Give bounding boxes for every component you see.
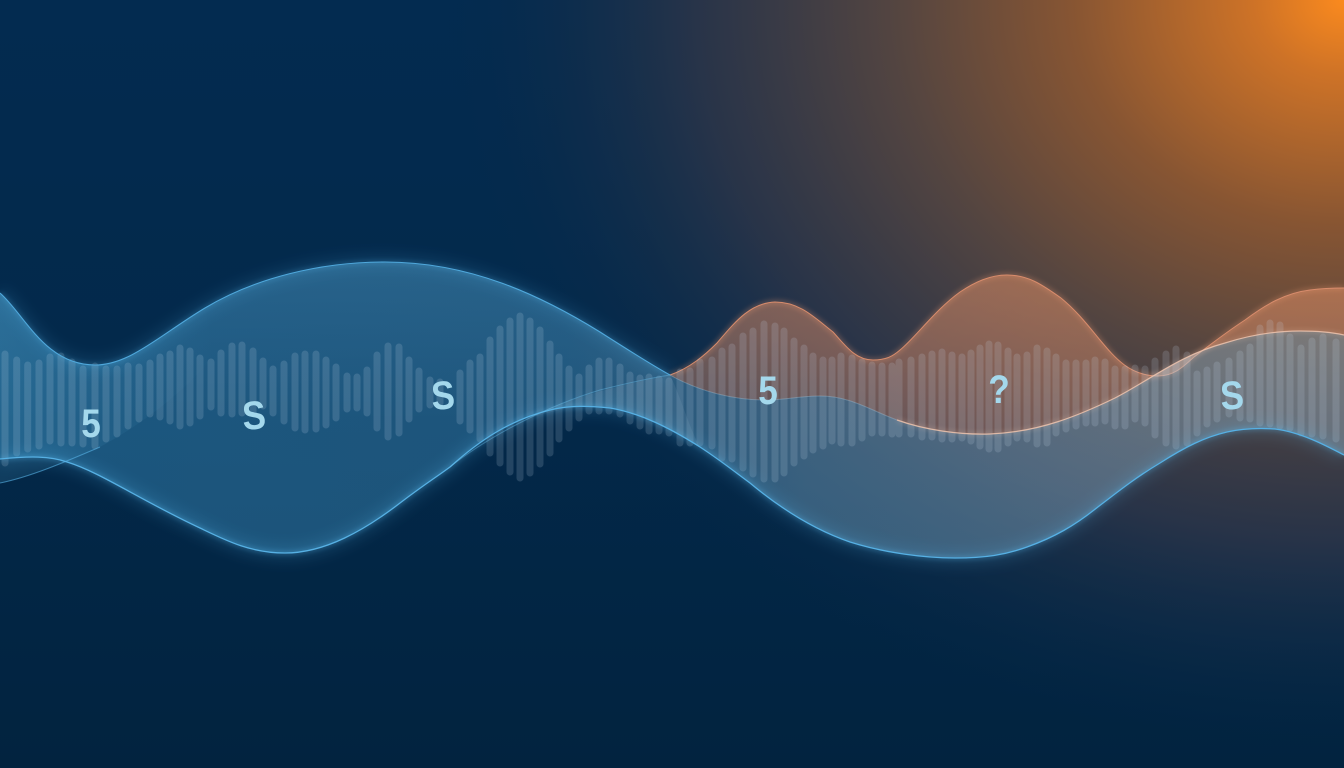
label 5 left: 5 <box>81 401 101 445</box>
band edge glows <box>0 262 1344 558</box>
label question mark: ? <box>988 367 1010 411</box>
blue wave band <box>0 262 1344 558</box>
centre overlapping fold <box>530 375 700 447</box>
label S centre: S <box>430 372 456 418</box>
label 5 middle: 5 <box>758 368 778 412</box>
wave labels <box>81 367 1245 445</box>
label S right: S <box>1219 372 1245 418</box>
soundwave bars <box>5 316 1336 479</box>
label S: S <box>241 392 267 438</box>
orange wave band <box>670 275 1344 434</box>
sharp edge: blue bottom <box>0 406 1344 558</box>
sharp edge: left fold <box>0 447 100 483</box>
sharp edge: blue top <box>0 262 670 375</box>
sharp edge: centre fold <box>450 375 670 467</box>
left overlapping fold <box>0 293 215 483</box>
sharp edge: pale crest <box>897 331 1344 434</box>
